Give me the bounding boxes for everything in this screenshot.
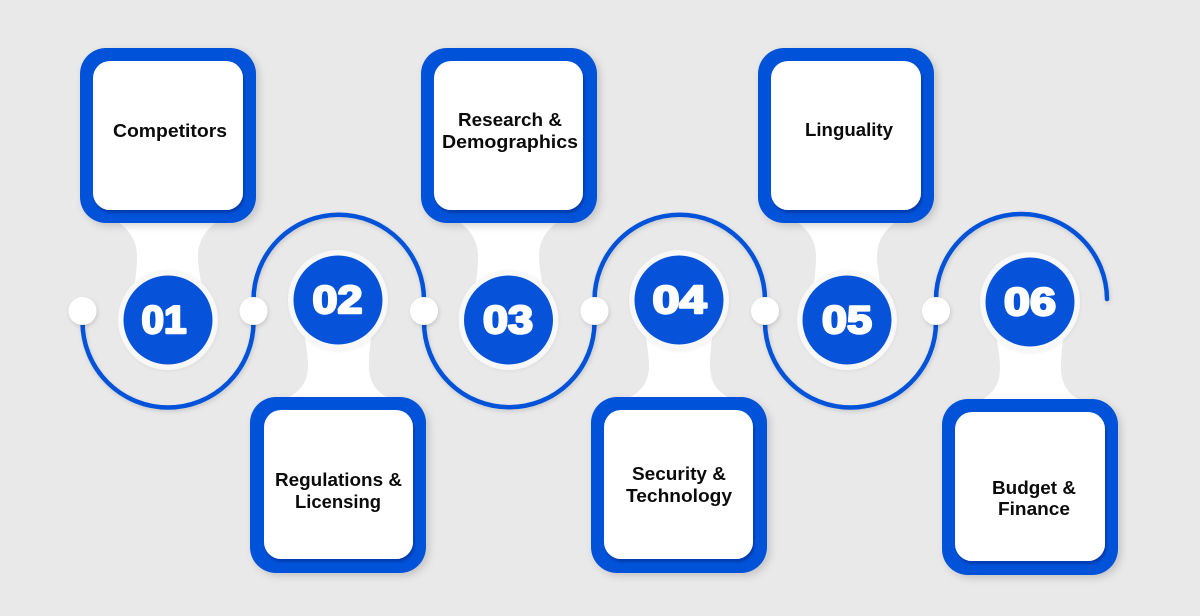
step 04: Technology [626, 485, 733, 506]
connector arcs [82, 214, 1107, 408]
card 03 inner [434, 61, 583, 210]
neck 03 [459, 222, 558, 286]
step 01 [80, 48, 256, 370]
number badge 05 [802, 276, 892, 364]
card 01 inner [93, 61, 243, 210]
neck 02 [287, 334, 389, 398]
step 06 [942, 252, 1118, 575]
halo 06 [980, 252, 1080, 352]
step 05 [758, 48, 934, 370]
step 03: Demographics [442, 131, 578, 152]
number badge 01 [124, 276, 212, 364]
step 06: Finance [998, 498, 1070, 519]
step 02 [250, 250, 426, 573]
card 05 [758, 48, 934, 223]
number badge 02 [294, 256, 382, 344]
card 04 inner [604, 410, 753, 559]
number 04: 04 [652, 279, 707, 322]
number 01: 01 [142, 299, 186, 342]
label 03: Research & [458, 109, 562, 130]
label 01: Competitors [113, 120, 227, 141]
halo 01 [118, 270, 218, 370]
label 02: Regulations & [275, 469, 402, 490]
card 02 inner [264, 410, 413, 559]
card 02 [250, 397, 426, 573]
number badge 06 [986, 258, 1074, 346]
card 03 [421, 48, 597, 223]
number 06: 06 [1004, 281, 1056, 324]
card 05 inner [771, 61, 921, 210]
number 02: 02 [312, 279, 362, 322]
number badge 03 [464, 276, 553, 364]
number 03: 03 [483, 299, 533, 342]
card 06 [942, 399, 1118, 575]
halo 05 [797, 270, 897, 370]
card 04 [591, 397, 767, 573]
number 05: 05 [822, 299, 872, 342]
step 03 [421, 48, 597, 370]
step 02: Licensing [295, 491, 381, 512]
label 06: Budget & [992, 477, 1076, 498]
halo 03 [458, 270, 558, 370]
label 04: Security & [632, 463, 726, 484]
halo 02 [288, 250, 388, 350]
neck 04 [628, 334, 730, 398]
white junction dots [68, 297, 950, 325]
card 01 [80, 48, 256, 223]
step 04 [591, 250, 767, 573]
number badge 04 [634, 256, 724, 344]
label 05: Linguality [805, 119, 894, 140]
halo 04 [629, 250, 729, 350]
card 06 inner [955, 412, 1105, 561]
neck 06 [981, 336, 1080, 400]
neck 05 [797, 222, 896, 286]
neck 01 [118, 222, 217, 286]
